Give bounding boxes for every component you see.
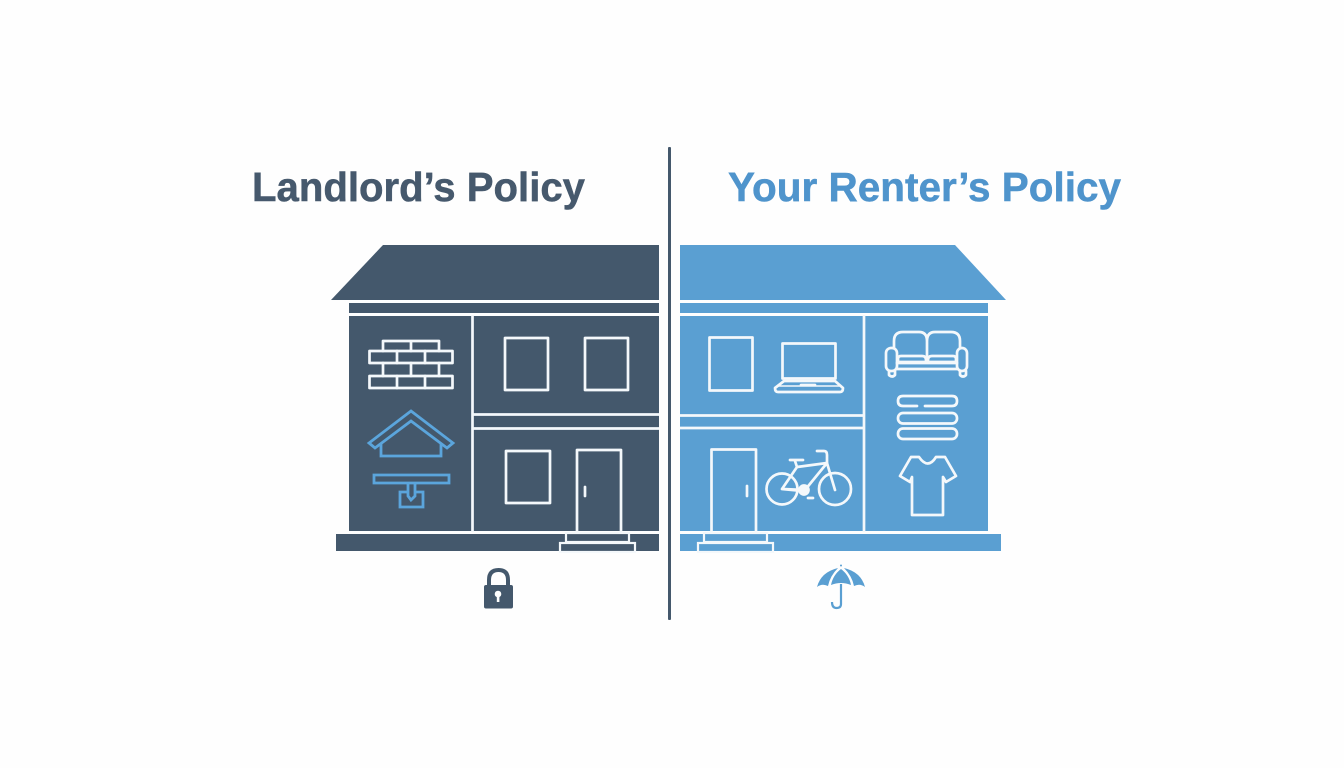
icon: bricks <box>370 341 452 388</box>
eave band <box>680 303 988 313</box>
icon: bicycle <box>766 451 851 505</box>
central divider <box>668 147 671 620</box>
upper right window <box>585 338 628 390</box>
icon: foundation trowel <box>374 475 449 507</box>
icon: roof structure <box>369 411 453 456</box>
walls <box>349 316 659 531</box>
roof <box>331 245 659 300</box>
lower window <box>506 451 550 503</box>
upper left window <box>505 338 548 390</box>
walls <box>680 316 988 531</box>
icon: umbrella <box>817 564 865 608</box>
front steps <box>698 533 773 552</box>
front steps <box>560 533 635 552</box>
panel: renter house <box>680 245 1006 552</box>
heading: Landlord's Policy: Landlord’s Policy <box>252 164 585 210</box>
foundation <box>336 534 659 551</box>
foundation <box>680 534 1001 551</box>
icon: padlock <box>484 570 513 608</box>
roof <box>680 245 1006 300</box>
icon: laptop <box>775 344 843 392</box>
icon: folded clothes stack <box>898 396 957 439</box>
panel: landlord house <box>331 245 659 552</box>
eave band <box>349 303 659 313</box>
heading: Your Renter's Policy: Your Renter’s Policy <box>728 164 1121 210</box>
icon: sofa <box>886 332 967 376</box>
window <box>710 338 752 390</box>
front door <box>577 450 621 532</box>
interior wall lines <box>472 315 659 532</box>
front door <box>712 450 756 532</box>
interior wall lines <box>680 315 864 532</box>
icon: t-shirt <box>900 457 956 515</box>
